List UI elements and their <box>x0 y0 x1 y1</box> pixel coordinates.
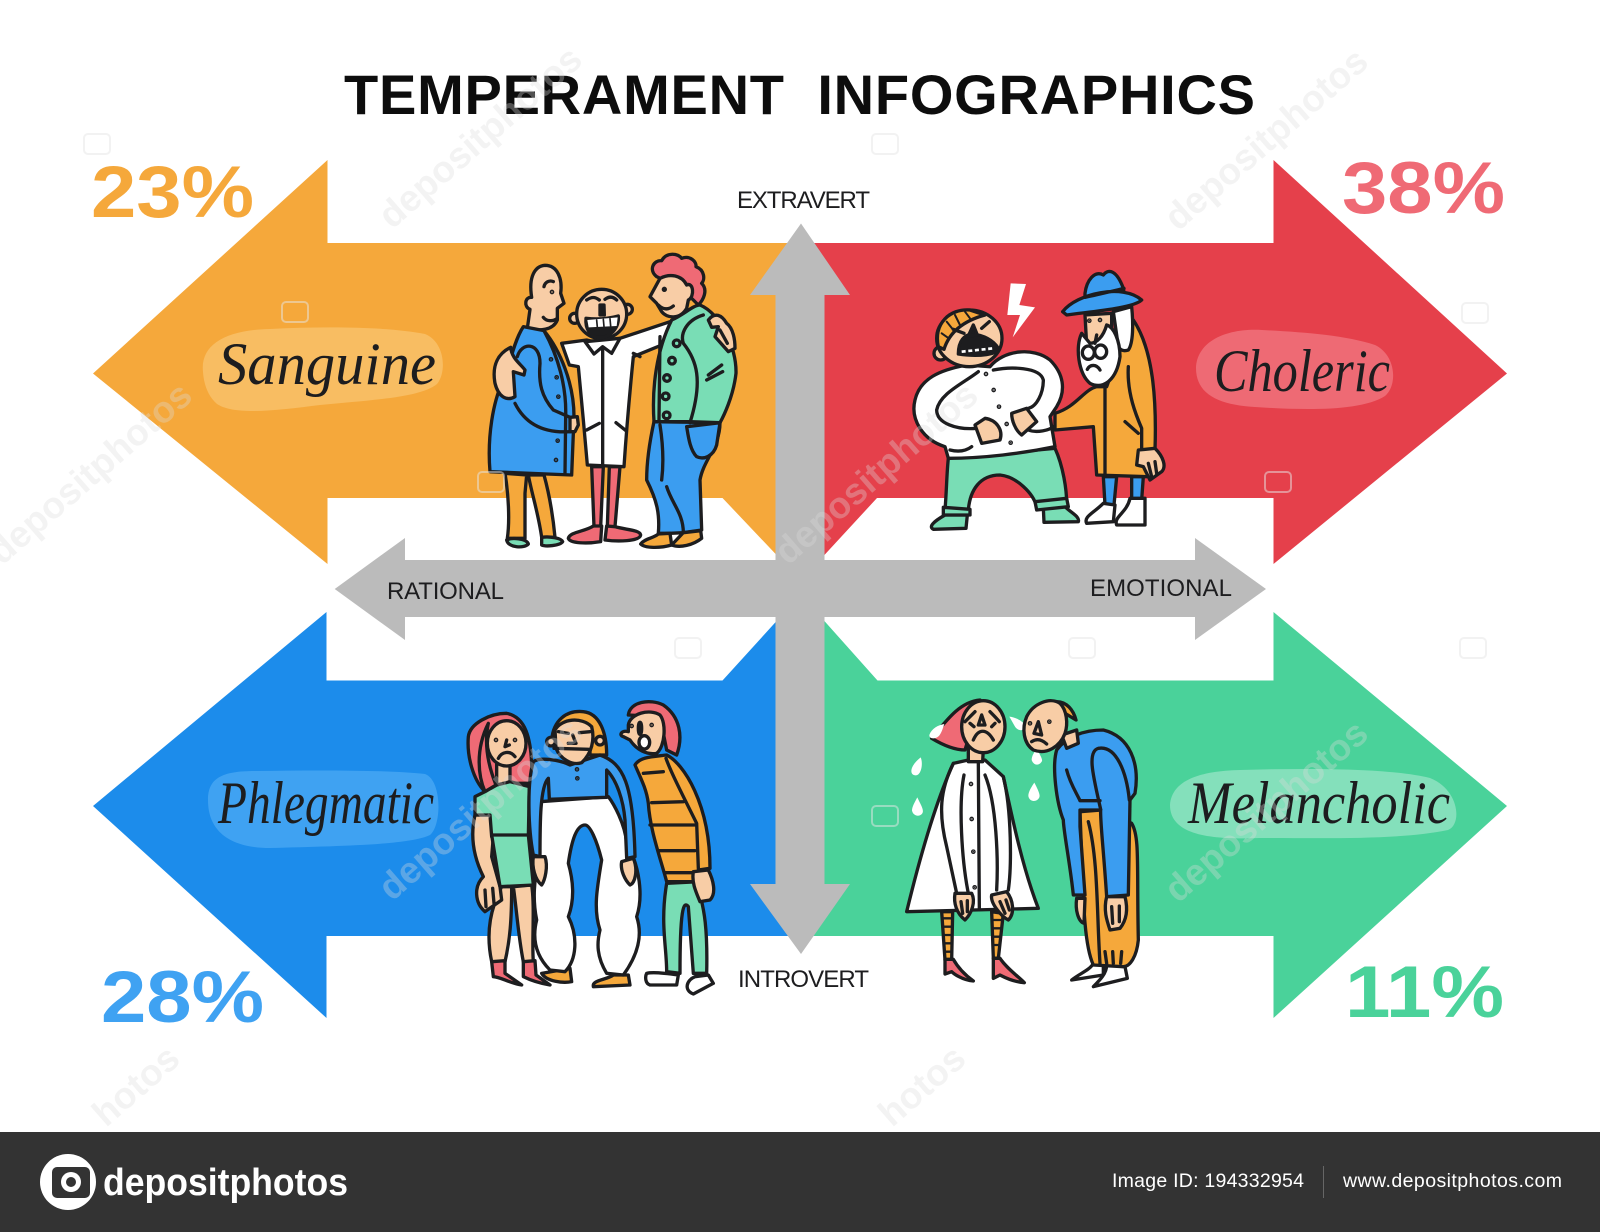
axis label: rational: RATIONAL <box>387 578 504 605</box>
logo icon: camera <box>40 1154 96 1210</box>
arrow: phlegmatic blue <box>93 612 790 1018</box>
percentage: sanguine: 23% <box>91 152 254 233</box>
figure: curly haired man in green cardigan <box>641 254 736 547</box>
figure: tall man in white trousers <box>529 711 640 987</box>
arrow: choleric red <box>810 160 1507 570</box>
axis label: introvert: INTROVERT <box>738 966 869 993</box>
label: choleric: Choleric <box>1214 338 1390 404</box>
arrow: sanguine orange <box>93 160 790 570</box>
label: phlegmatic: Phlegmatic <box>217 770 434 836</box>
footer bar <box>0 1132 1600 1232</box>
label: phlegmatic <box>208 770 438 848</box>
hand on shoulder of bald man <box>494 347 525 399</box>
icon: lightning bolt <box>1007 283 1035 337</box>
logo wordmark: depositphotos <box>103 1162 348 1204</box>
website: www.depositphotos.com <box>1342 1170 1562 1192</box>
watermarks: depositphotos <box>766 374 986 572</box>
percentage: phlegmatic: 28% <box>101 957 264 1038</box>
figure: sad woman <box>468 713 550 985</box>
axis label: extravert: EXTRAVERT <box>737 187 870 214</box>
illustration: sanguine trio <box>489 254 736 547</box>
title: TEMPERAMENT INFOGRAPHICS <box>344 63 1255 126</box>
image id: Image ID: 194332954 <box>1112 1170 1304 1192</box>
illustration: melancholic pair <box>907 700 1138 987</box>
arrow: melancholic green <box>810 612 1507 1018</box>
illustration: phlegmatic trio <box>468 702 714 994</box>
axis label: emotional: EMOTIONAL <box>1090 575 1232 602</box>
figure: angry man <box>914 310 1079 529</box>
label: choleric <box>1196 330 1393 409</box>
figure: laughing man in white coat <box>562 289 674 543</box>
figure: crying bald man bending <box>1024 701 1138 987</box>
percentage: melancholic: 11% <box>1345 952 1504 1033</box>
label: sanguine: Sanguine <box>218 331 436 397</box>
watermarks: depositphotos <box>1156 40 1376 238</box>
axes cross <box>335 224 1266 954</box>
illustration: choleric pair <box>914 271 1164 529</box>
watermarks: depositphotos <box>370 38 590 236</box>
watermarks: hotos <box>84 1037 187 1134</box>
percentage: choleric: 38% <box>1342 148 1505 229</box>
watermarks: hotos <box>870 1037 973 1134</box>
watermarks: depositphotos <box>1156 712 1376 910</box>
icon: tear drops <box>911 717 1042 816</box>
watermarks: depositphotos <box>370 710 590 908</box>
figure: surprised woman in striped sweater <box>621 702 714 994</box>
label: melancholic: Melancholic <box>1187 770 1450 836</box>
figure: old man with hat and beard <box>1055 271 1164 525</box>
figure: bald man in blue coat <box>489 265 578 547</box>
figure: crying woman <box>907 700 1038 983</box>
